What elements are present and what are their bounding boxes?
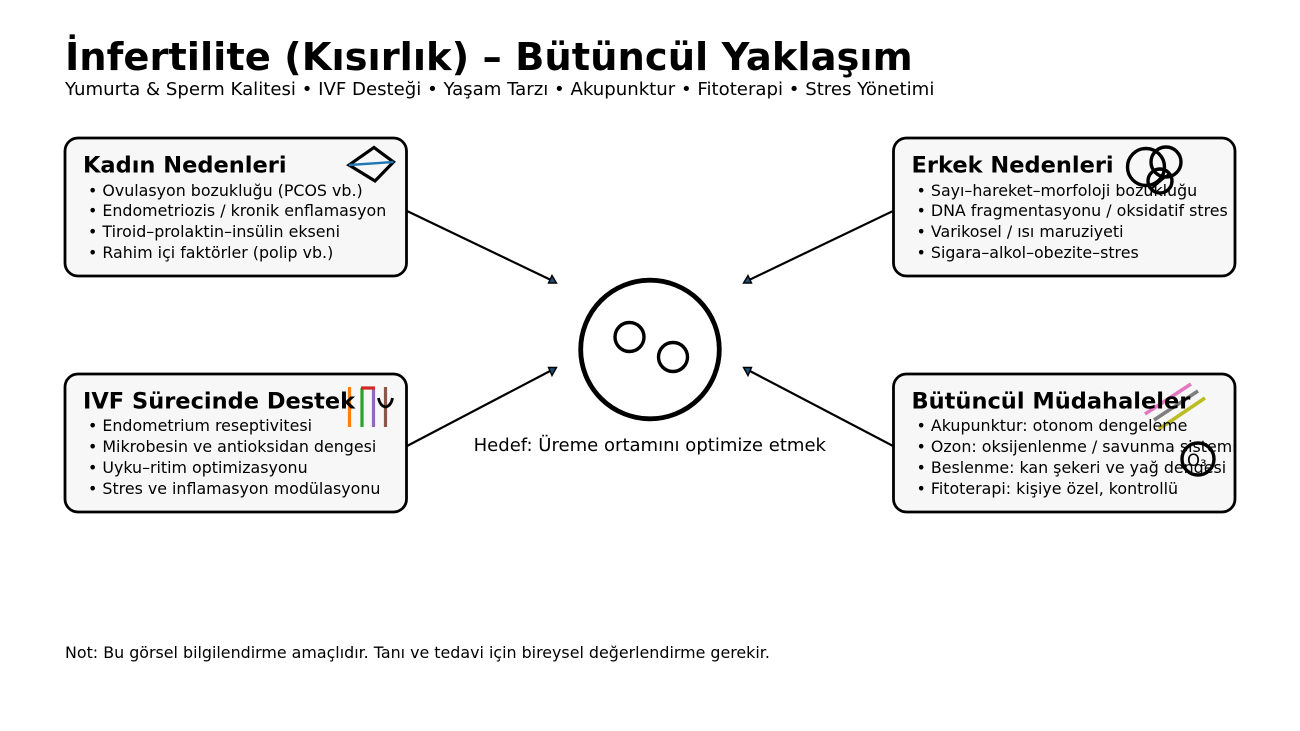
heading: Bütüncül Müdahaleler: Bütüncül Müdahaleler <box>912 388 1191 414</box>
icon: needles <box>1145 384 1205 429</box>
heading: IVF Sürecinde Destek: IVF Sürecinde Destek <box>83 388 356 414</box>
icon: diamond <box>349 148 394 181</box>
panel: Bütüncül Müdahaleler <box>894 374 1237 512</box>
title: İnfertilite (Kısırlık) – Bütüncül Yaklaşım <box>65 33 913 80</box>
arrow: male causes to goal <box>744 211 893 283</box>
list: holistic interventions <box>916 416 1237 498</box>
list: IVF support <box>88 416 380 498</box>
arrow: female causes to goal <box>407 211 556 283</box>
list: IVF support: • Endometrium reseptivitesi <box>88 416 312 435</box>
arrow: holistic interventions to goal <box>744 368 893 446</box>
arrow: IVF support to goal <box>407 368 556 446</box>
goal label: Hedef: Üreme ortamını optimize etmek <box>474 434 827 456</box>
list: IVF support: • Stres ve inflamasyon modülasyonu <box>88 479 380 498</box>
list: holistic interventions: • Beslenme: kan şekeri ve yağ dengesi <box>916 458 1226 477</box>
icon: central cell <box>581 280 719 419</box>
list: female causes <box>88 181 386 262</box>
list: female causes: • Rahim içi faktörler (polip vb.) <box>88 243 333 262</box>
list: holistic interventions: • Fitoterapi: kişiye özel, kontrollü <box>916 479 1178 498</box>
icon: overlapping circles <box>1128 147 1181 193</box>
list: male causes <box>916 181 1228 262</box>
panel: Kadın Nedenleri <box>65 138 406 276</box>
icon: ozone O3 <box>1182 443 1214 475</box>
list: female causes: • Tiroid–prolaktin–insülin ekseni <box>88 222 340 241</box>
list: male causes: • DNA fragmentasyonu / oksidatif stres <box>916 201 1228 220</box>
list: male causes: • Sayı–hareket–morfoloji bozukluğu <box>916 181 1197 200</box>
subtitle: Yumurta & Sperm Kalitesi • IVF Desteği • Yaşam Tarzı • Akupunktur • Fitoterapi • Stres Yönetimi <box>64 79 934 100</box>
icon: ozone O3: O₃ <box>1187 451 1207 470</box>
list: male causes: • Varikosel / ısı maruziyeti <box>916 222 1123 241</box>
list: IVF support: • Uyku–ritim optimizasyonu <box>88 458 308 477</box>
panel: Erkek Nedenleri <box>894 138 1235 276</box>
list: female causes: • Endometriozis / kronik enflamasyon <box>88 201 386 220</box>
list: female causes: • Ovulasyon bozukluğu (PCOS vb.) <box>88 181 363 200</box>
list: holistic interventions: • Ozon: oksijenlenme / savunma sistemi <box>916 437 1237 456</box>
list: male causes: • Sigara–alkol–obezite–stres <box>916 243 1139 262</box>
heading: Erkek Nedenleri: Erkek Nedenleri <box>912 152 1114 178</box>
panel: IVF Sürecinde Destek <box>65 374 406 512</box>
list: holistic interventions: • Akupunktur: otonom dengeleme <box>916 416 1187 435</box>
heading: Kadın Nedenleri: Kadın Nedenleri <box>83 152 287 178</box>
icon: instruments <box>350 387 392 427</box>
footnote: Not: Bu görsel bilgilendirme amaçlıdır. Tanı ve tedavi için bireysel değerlendirme gerekir. <box>65 643 770 662</box>
list: IVF support: • Mikrobesin ve antioksidan dengesi <box>88 437 376 456</box>
